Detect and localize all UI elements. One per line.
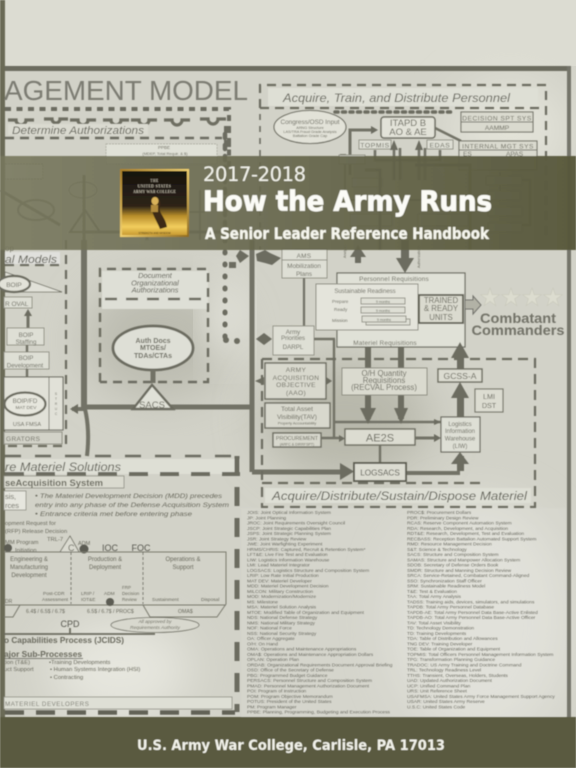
glossary: second column: USAR: United States Army Reserve	[407, 699, 485, 705]
lifecycle chart: IOT&E	[81, 597, 95, 603]
box: BOIP FD MAT DEV: U	[55, 407, 58, 411]
box: internal management system: ES	[463, 151, 472, 158]
heading: materiel solutions	[5, 456, 240, 474]
box: on-hand quantity requisitions: O/H Quantity	[361, 369, 407, 378]
glossary: first column: NMS: National Military Strategy	[247, 620, 316, 626]
glossary: first column: LMI: Lead Materiel Integrator	[247, 562, 310, 568]
glossary: second column: RMD: Resource Management Decision	[407, 542, 492, 548]
text: sub-process list: tion (T&E)	[4, 660, 30, 666]
lifecycle chart: 6.5$ / 6.7$ / PROC$	[87, 609, 134, 615]
glossary: second column: RDT&E: Research, Development, Test and Evaluation	[407, 531, 524, 537]
text: RFP release: Initiation	[15, 548, 37, 554]
heading: materiel solutions: re Materiel Solutions	[5, 462, 121, 474]
lifecycle chart: DR	[5, 599, 13, 605]
glossary: second column: TAV: Total Asset Visibility	[407, 620, 461, 626]
lifecycle chart: 6.4$ / 6.5$ / 6.7$	[26, 609, 65, 615]
box: AMS and mobilization plans: Mobilization	[287, 263, 321, 270]
footer text: U.S. Army War College, Carlisle, PA 17013	[137, 738, 445, 754]
panel: sustainable readiness: 9 months	[377, 318, 391, 322]
arrows: personnel inputs: Analysis	[343, 245, 347, 258]
text: decision bullets: • Entrance criteria met before entering phase	[35, 511, 193, 518]
heading: major sub-processes: ajor Sub-Processes	[4, 649, 82, 659]
glossary: second column: SSO: Synchronization Staff Officer	[407, 578, 482, 584]
glossary: first column: OMA: Operations and Maintenance Appropriations	[247, 646, 357, 652]
box: BOIP FD MAT DEV: BOIP/FD	[13, 398, 38, 405]
band: materiel developers: MATERIEL DEVELOPERS	[5, 701, 89, 708]
glossary: second column: SRCA: Service-Retained, Combatant Command-Aligned	[407, 573, 530, 579]
box: personnel requisitions: Materiel Requisitions	[353, 340, 417, 347]
band: materiel developers	[4, 697, 232, 709]
box: AE2S	[345, 429, 415, 445]
glossary: first column: PM: Program Manager	[247, 704, 297, 710]
glossary: first column: OA: Officer Aggregate	[247, 636, 295, 642]
footer band	[0, 717, 576, 768]
box: on-hand quantity requisitions	[342, 368, 427, 395]
glossary: first column: LOGSACS: Logistics Structure and Composition System	[247, 568, 369, 574]
glossary: second column: TAPDB-AE: Total Army Personnel Data Base-Active Enlisted	[407, 610, 538, 616]
glossary: first column: OSD: Office of the Secretary of Defense	[247, 668, 334, 674]
box: TOPMIS: TOPMIS	[360, 142, 390, 150]
panel: sustainable readiness: Mission	[332, 318, 348, 323]
glossary: second column: RCAS: Reserve Component Automation System	[407, 521, 512, 527]
lifecycle chart: Sustainment	[152, 597, 179, 603]
box: army acquisition objective: ARMY	[286, 367, 306, 374]
ellipse: auth docs: TDAs/CTAs	[134, 353, 172, 360]
glossary: second column: USAFMSA: United States Army Force Management Support Agency	[407, 694, 555, 700]
glossary: first column: OMA$: Operations and Maintenance Appropriation Dollars	[247, 652, 374, 658]
glossary: second column: SRM: Sustainable Readiness Model	[407, 584, 485, 590]
label: CPD	[4, 619, 155, 634]
icon: milestone C triangle	[4, 536, 91, 554]
text: sub-process list: • Human Systems Integration (HSI)	[50, 667, 140, 673]
box: internal management system: INTERNAL MGT SYS	[462, 144, 534, 150]
band: acquire distribute label: Acquire/Distribute/Sustain/Dispose Materiel	[271, 491, 528, 503]
glossary: second column: TOPMIS: Total Officers Personnel Management Information System	[407, 652, 554, 658]
box: EDAS	[427, 140, 453, 150]
lifecycle chart: Post-CDR	[43, 591, 65, 597]
ellipse: auth docs	[113, 326, 193, 370]
box: total asset visibility: Property Accountability	[278, 422, 316, 426]
lifecycle chart	[4, 552, 226, 617]
text: document organizational authorizations: Document	[138, 271, 173, 280]
glossary: first column	[247, 510, 393, 716]
box: analysis of alternatives: sis,	[5, 492, 16, 501]
box: BOIP development: Development	[7, 362, 44, 370]
glossary: second column: SAMAS: Structure and Manpower Allocation System	[407, 557, 520, 563]
glossary: first column: MSA: Materiel Solution Analysis	[247, 604, 317, 610]
panel: document organizational authorizations	[84, 240, 250, 411]
box: army priorities DARPL: DARPL	[283, 344, 304, 351]
lifecycle chart: Engineering &	[10, 557, 48, 563]
box: BOIP staffing: BOIP	[19, 332, 33, 339]
glossary: first column: JSR: Joint Strategy Review	[247, 536, 307, 542]
box: PPBE: PPBE	[158, 145, 170, 150]
logo: Army War College seal: UNITED STATES	[138, 184, 171, 188]
box: analysis of alternatives	[4, 491, 26, 510]
box: army priorities DARPL	[273, 326, 314, 355]
icon: four stars	[481, 288, 562, 306]
glossary: second column: UAD: Updated Authorization Document	[407, 678, 492, 684]
glossary: first column: JSPS: Joint Strategic Planning System	[247, 531, 331, 537]
box: analysis of alternatives: rces	[5, 501, 19, 510]
text: sub-process list: •Training Developments	[49, 660, 111, 666]
glossary: second column: TD: Technology Demonstration	[407, 626, 474, 632]
box: AMS and mobilization plans: AMS	[297, 253, 311, 260]
text: decision bullets: entry into any phase of the Defense Acquisition System	[35, 502, 229, 509]
arrows: requisitions to AE2S	[360, 347, 408, 424]
subtitle: senior leader reference handbook: A Senior Leader Reference Handbook	[205, 224, 489, 243]
label: CPD: CPD	[60, 619, 80, 629]
box: BOIP FD MAT DEV: USA FMSA	[13, 422, 41, 428]
box: approval: R OVAL	[5, 301, 29, 308]
glossary: first column: NOF: National Force	[247, 626, 292, 632]
box: ITAPDB: ITAPD B	[390, 118, 426, 129]
glossary: second column: SDOB: Secretary of Defense Orders Book	[407, 562, 499, 568]
heading: al models: al Models	[5, 254, 58, 266]
box: total asset visibility	[265, 403, 330, 428]
box: total asset visibility: Visibility(TAV)	[277, 414, 317, 421]
glossary: first column: LIW: Logistics Information Warehouse	[247, 557, 330, 563]
box: LMI DST: LMI	[483, 392, 495, 401]
glossary: first column: PBG: Programmed Budget Guidance	[247, 673, 328, 679]
glossary: first column: NDS: National Defense Strategy	[247, 615, 318, 621]
text: sub-process list	[4, 660, 140, 681]
glossary: first column: PPBE: Planning, Programming, Budgeting and Execution Process	[247, 710, 391, 716]
band: acquire distribute label	[265, 488, 531, 503]
glossary: first column: POM: Program Objective Memorandum	[247, 694, 333, 700]
box: LOGSACS: LOGSACS	[360, 468, 400, 478]
glossary: second column: TAPDB-AO: Total Army Personnel Data Base-Active Officer	[407, 615, 536, 621]
box: personnel requisitions: Personnel Requisitions	[359, 276, 429, 283]
panel: left models under banner	[0, 164, 240, 250]
glossary: first column: JP: Joint Planning	[247, 515, 286, 521]
glossary: first column: O/H: On Hand	[247, 641, 278, 647]
icon: milestone C triangle: C	[68, 543, 75, 553]
box: on-hand quantity requisitions: (RECVAL Process)	[351, 383, 417, 392]
heading: al models	[5, 244, 60, 266]
box: army acquisition objective	[265, 363, 326, 399]
box: procurement: (ARFC & DIRRFSPT)	[280, 442, 314, 446]
box: GCSS-A	[438, 369, 482, 382]
box: LMI DST	[475, 389, 503, 412]
box: AE2S: AE2S	[366, 432, 394, 444]
lifecycle chart: Decision	[122, 591, 140, 596]
box: trained and ready units: TRAINED	[424, 296, 458, 305]
panel: sustainable readiness: 9 months	[376, 300, 390, 304]
box: EDAS: EDAS	[430, 142, 450, 150]
box: logistics information warehouse: Warehouse	[445, 436, 476, 442]
glossary: second column: TDA: Table of Distribution and Allowances	[407, 636, 498, 642]
box: army priorities DARPL: Priorities	[281, 335, 305, 342]
box: logistics information warehouse: (LIW)	[453, 444, 467, 450]
lifecycle chart: Operations &	[165, 557, 201, 563]
text: RFP release: opment Request for	[5, 521, 56, 527]
box: trained and ready units	[419, 295, 463, 323]
panel: sustainable readiness: Ready	[334, 307, 348, 312]
icon: milestone C triangle: ADM	[78, 541, 91, 547]
glossary: second column: U.S.C: United States Code	[407, 704, 465, 710]
box: BOIP FD MAT DEV: MAT DEV	[16, 405, 37, 411]
arrows: personnel inputs: Authorizations	[417, 246, 421, 268]
box: army acquisition objective: OBJECTIVE	[276, 382, 316, 389]
text: RFP release: (RFP) Release Decision	[5, 529, 67, 535]
label: combatant commanders: Combatant	[480, 310, 556, 326]
lifecycle chart: ADM	[104, 591, 115, 597]
panel: acronym glossary	[241, 508, 566, 717]
box: trained and ready units: & READY	[424, 304, 459, 313]
box: procurement	[273, 433, 321, 447]
glossary: first column: ORDAB: Organizational Requirements Document Approval Briefing	[247, 662, 393, 668]
ellipse: congress OSD input	[274, 110, 346, 144]
box: GCSS-A: GCSS-A	[444, 371, 477, 381]
glossary: second column: TOE: Table of Organization and Equipment	[407, 646, 501, 652]
box: integrators: GRATORS	[6, 436, 41, 443]
panel: acquire train distribute personnel	[260, 85, 546, 250]
glossary: first column: PERSACS: Personnel Structure and Composition System	[247, 678, 372, 684]
glossary: first column: MAT DEV: Materiel Developer	[247, 578, 312, 584]
box: ITAPDB	[381, 117, 435, 138]
box: AMS and mobilization plans	[282, 249, 327, 278]
glossary: second column: RECBASS: Reception Battalion Automated Support System	[407, 536, 536, 542]
panel: sustainable readiness: 9 months	[376, 309, 390, 313]
box: logistics information warehouse	[441, 417, 480, 452]
lifecycle chart: Disposal	[201, 597, 219, 603]
box: BOIP staffing	[7, 328, 44, 346]
ellipse: congress OSD input: ARNG Structure	[296, 126, 324, 130]
box: BOIP FD MAT DEV	[4, 377, 63, 430]
box: BOIP FD MAT DEV: T	[55, 397, 57, 401]
text: sub-process list: • Contracting	[50, 675, 83, 681]
arrow: to combatant commanders	[465, 296, 481, 314]
box: total asset visibility: Total Asset	[281, 406, 313, 413]
box: army acquisition objective: ACQUISITION	[273, 375, 319, 382]
glossary: first column: MS: Milestone	[247, 599, 278, 605]
glossary: second column: TADSS: Training aids, devices, simulators, and simulations	[407, 599, 535, 605]
ellipse: approved by requirements authority: Requirements Authority	[130, 625, 181, 631]
glossary: second column: TD: Training Developments	[407, 631, 467, 637]
logo: Army War College seal	[120, 169, 189, 237]
glossary: second column: TNG DEV: Training Developer	[407, 641, 473, 647]
lifecycle chart: Assessment	[42, 597, 69, 603]
box: logistics information warehouse: Logistics	[448, 422, 472, 428]
glossary: first column: HRMS/CHRIS: Captured, Recruit & Retention System*	[247, 547, 366, 553]
text: RFP release: MM Program	[5, 540, 39, 546]
lifecycle chart: Deployment	[89, 565, 121, 571]
box: approval	[4, 297, 32, 308]
box: BOIP FD MAT DEV: C	[55, 412, 58, 416]
glossary: first column: JSCP: Joint Strategic Capabilities Plan	[247, 526, 331, 532]
box: personnel requisitions	[337, 273, 465, 347]
glossary: first column: MILCON: Military Construction	[247, 589, 313, 595]
box: BOIP FD MAT DEV: R	[55, 402, 58, 406]
text: document organizational authorizations: Organizational	[131, 278, 179, 288]
glossary: second column: SMDR: Structure and Manning Decision Review	[407, 568, 512, 574]
logo: Army War College seal: ARMY WAR COLLEGE	[133, 190, 176, 194]
heading: defense acquisition system: seAcquisition System	[5, 478, 103, 489]
logo: Army War College seal: STRENGTH AND WISDOM	[138, 231, 170, 235]
logo: Army War College seal: THE	[150, 179, 159, 183]
lifecycle chart: OMA$	[178, 609, 193, 615]
glossary: first column: MTOE: Modified Table of Organization and Equipment	[247, 610, 365, 616]
glossary: first column: MOD: Modernization/Modernize	[247, 594, 316, 600]
label: combatant commanders	[472, 310, 565, 338]
title banner	[0, 156, 576, 250]
box: decision support system: AAMMP	[485, 125, 510, 132]
heading: acquire train distribute: Acquire, Train, and Distribute Personnel	[282, 91, 510, 105]
glossary: second column: URS: Unit Reference Sheet	[407, 688, 467, 694]
box: PPBE: (MDEP, Total Requir. & $)	[142, 151, 188, 156]
panel: BOIP flow	[0, 240, 88, 456]
glossary: first column: LFT&E: Live Fire Test and Evaluation	[247, 552, 328, 558]
dashed boundary	[262, 359, 535, 507]
glossary: second column: TPG: Transformation Planning Guidance	[407, 657, 495, 663]
panel: sustainable readiness	[316, 284, 418, 330]
ellipse: approved by requirements authority: All approved by	[137, 619, 172, 625]
box: AMS and mobilization plans: Plans	[296, 271, 312, 278]
ellipse: congress OSD input: Battalion Grade Cap	[293, 134, 327, 138]
text: decision bullets: • The Materiel Development Decision (MDD) precedes	[35, 493, 222, 500]
ellipse: approved by requirements authority	[111, 618, 199, 632]
arrows: personnel inputs	[343, 240, 421, 273]
text: document organizational authorizations: Authorizations	[131, 286, 179, 294]
ellipse: auth docs: Auth Docs	[136, 338, 171, 345]
title: how the army runs: How the Army Runs	[203, 184, 492, 218]
lifecycle chart: Production &	[88, 557, 122, 563]
text: document organizational authorizations	[131, 271, 179, 294]
glossary: first column: PMAD: Personnel Management Authorization Document	[247, 683, 370, 689]
box: LOGSACS	[354, 463, 406, 481]
box: internal management system: APAS	[506, 151, 524, 158]
box: integrators	[4, 432, 62, 444]
box: BOIP development: BOIP	[19, 355, 33, 362]
text: sub-process list: uct Support	[4, 667, 34, 673]
box: trained and ready units: UNITS	[429, 313, 453, 322]
glossary: first column: JROC: Joint Requirements Oversight Council	[247, 521, 345, 527]
heading: management model: AGEMENT MODEL	[4, 75, 248, 106]
arrows: up to requirements	[406, 342, 469, 473]
box: decision support system	[461, 112, 533, 132]
lifecycle chart: Development	[11, 573, 47, 579]
box: logistics information warehouse: Information	[445, 429, 475, 435]
glossary: first column: POTUS: President of the United States	[247, 699, 332, 705]
glossary: second column: SACS: Structure and Composition System	[407, 552, 499, 558]
glossary: first column: LRIP: Low Rate Initial Production	[247, 573, 319, 579]
box: decision support system: DECISION SPT SYS	[462, 116, 532, 122]
panel: sustainable readiness: Prepare	[332, 299, 349, 304]
ellipse: congress OSD input: Congress/OSD Input	[281, 119, 340, 126]
ellipse: BOIP: BOIP	[6, 282, 22, 289]
glossary: second column: PDR: Preliminary Design Review	[407, 515, 479, 521]
label: FOC: FOC	[132, 543, 151, 553]
triangle: SACS: SACS	[139, 400, 165, 411]
lifecycle chart: Manufacturing	[10, 565, 48, 571]
glossary: second column: PROC$: Procurement Dollars	[407, 510, 472, 516]
box: army acquisition objective: (AAO)	[286, 390, 306, 397]
glossary: first column: NSS: National Security Strategy	[247, 631, 317, 637]
box: on-hand quantity requisitions: Requisitions	[363, 376, 405, 385]
heading: JCIDS: o Capabilities Process (JCIDS)	[4, 635, 124, 645]
box: BOIP staffing: Staffing	[16, 339, 37, 346]
lines under banner	[339, 155, 530, 250]
box: ITAPDB: AO & AE	[389, 127, 427, 138]
triangle: SACS	[133, 385, 173, 411]
glossary: first column: MDD: Materiel Development Decision	[247, 584, 329, 590]
glossary: second column: RDA: Research, Development, and Acquisition	[407, 526, 508, 532]
box: BOIP FD MAT DEV: S	[55, 392, 57, 396]
glossary: second column: TAPDB: Total Army Personnel Database	[407, 604, 494, 610]
glossary: first column: JWE: Joint Warfighting Experiment	[247, 542, 323, 548]
panel: defense acquisition system	[4, 476, 235, 712]
label: combatant commanders: Commanders	[472, 322, 565, 338]
box: BOIP development	[4, 352, 49, 370]
box: internal management system	[459, 141, 537, 170]
label: IOC: IOC	[102, 543, 118, 553]
glossary: second column	[407, 510, 555, 710]
glossary: second column: TRL: Technology Readiness Level	[407, 668, 481, 674]
panel: determine authorizations	[5, 109, 231, 240]
ellipse: BOIP	[0, 276, 30, 292]
glossary: first column: POI: Program of Instruction	[247, 688, 307, 694]
glossary: second column: UCP: Unified Command Plan	[407, 683, 471, 689]
glossary: second column: TAA: Total Army Analysis	[407, 594, 461, 600]
ellipse: congress OSD input: LAS/TRA Fraud Grade Analysis	[283, 130, 337, 134]
lifecycle chart: FRP	[122, 585, 131, 590]
box: PPBE	[106, 144, 217, 164]
box: army priorities DARPL: Army	[286, 329, 301, 336]
panel: acquire distribute sustain dispose materiel	[252, 240, 565, 507]
box: procurement: PROCUREMENT	[276, 436, 319, 442]
glossary: second column: S&T: Science & Technology	[407, 547, 467, 553]
lifecycle chart: LRIP /	[81, 591, 95, 597]
text: RFP release: TRL-7	[47, 537, 63, 543]
heading: defense acquisition system	[4, 476, 124, 489]
glossary: second column: TTHS: Transient, Overseas, Holders, Students	[407, 673, 508, 679]
text: decision bullets	[35, 493, 229, 518]
text: determine authorizations: Determine Authorizations	[12, 125, 145, 137]
panel: sustainable readiness: Sustainable Readiness	[334, 289, 396, 295]
heading: al models: op	[5, 244, 14, 253]
box: LMI DST: DST	[482, 401, 497, 410]
ellipse: auth docs: MTOEs/	[140, 345, 166, 352]
lifecycle chart: Review	[122, 597, 138, 602]
glossary: first column: JOIS: Joint Optical Information System	[247, 510, 331, 516]
glossary: second column: TRADOC: US Army Training and Doctrine Command	[407, 662, 522, 668]
glossary: second column: T&E: Test & Evaluation	[407, 589, 457, 595]
glossary: first column: OPLAN: Operation Plan	[247, 657, 299, 663]
text: RFP release	[5, 521, 67, 554]
title: year: 2017-2018	[203, 163, 306, 186]
lifecycle chart: Support	[172, 565, 194, 571]
box: TOPMIS	[359, 140, 391, 150]
